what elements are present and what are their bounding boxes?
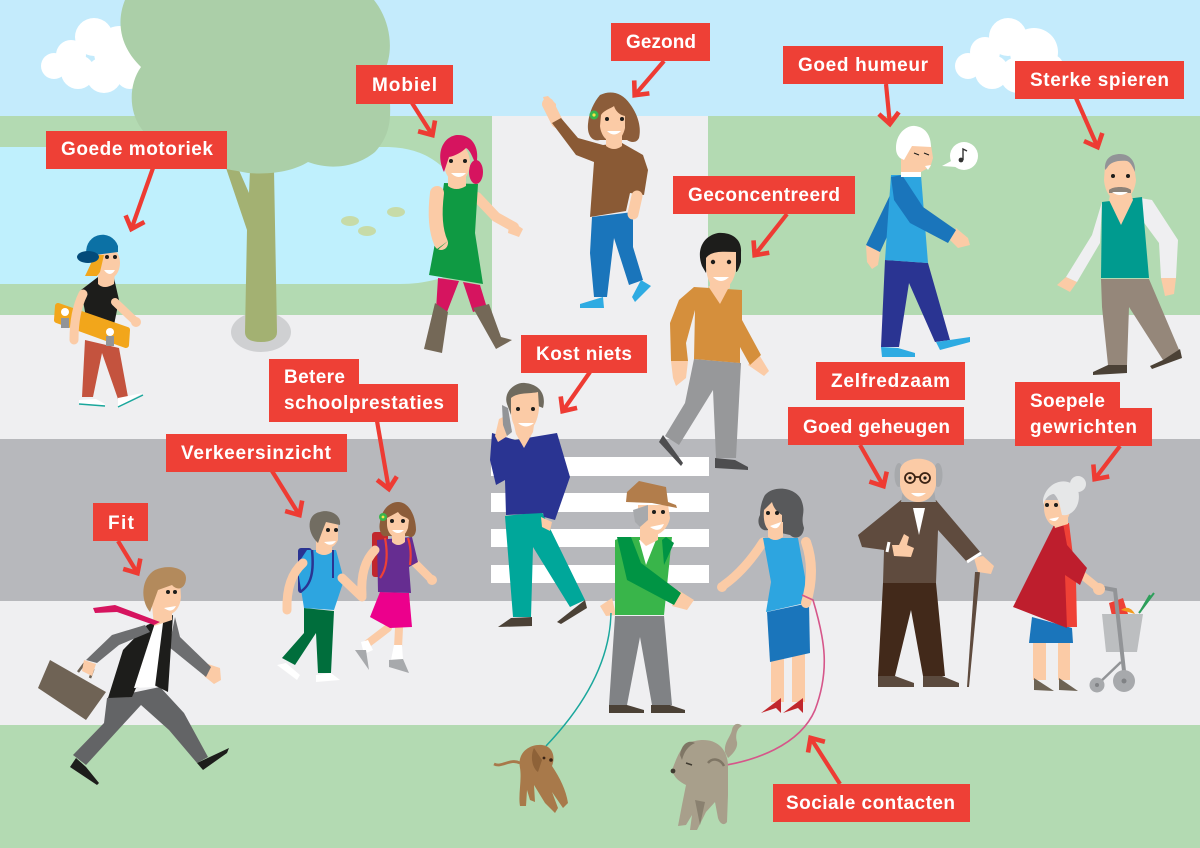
person: older man in teal vest xyxy=(1057,154,1182,375)
label: Fit: Fit xyxy=(108,513,135,534)
label: Betere schoolprestaties: Betere xyxy=(284,367,345,388)
person: waving woman in brown xyxy=(543,92,651,308)
label: Geconcentreerd xyxy=(673,176,855,256)
zebra crossing xyxy=(491,457,709,583)
label: Kost niets xyxy=(521,335,647,412)
label: Gezond: Gezond xyxy=(626,32,696,53)
dog: brown xyxy=(494,745,568,813)
label: Verkeersinzicht xyxy=(166,434,347,516)
person: singing man with white hair xyxy=(866,126,970,357)
leash: teal xyxy=(546,613,611,746)
label: Goed humeur: Goed humeur xyxy=(798,55,929,76)
person: woman in blue with dog leash xyxy=(717,489,811,713)
label: Goed geheugen: Goed geheugen xyxy=(803,417,950,438)
person: man with hat walking a dog xyxy=(600,481,694,713)
label: Mobiel xyxy=(356,65,453,136)
water lilies xyxy=(341,207,405,236)
label: Sociale contacten xyxy=(773,737,970,822)
person: older woman with shopping trolley xyxy=(1013,476,1154,692)
label: Verkeersinzicht: Verkeersinzicht xyxy=(181,443,332,464)
label: Goed humeur xyxy=(783,46,943,125)
label: Gezond xyxy=(611,23,710,96)
label: Soepele gewrichten xyxy=(1015,382,1152,480)
label: Kost niets: Kost niets xyxy=(536,344,632,365)
shopping trolley xyxy=(1090,588,1154,692)
label: Goede motoriek: Goede motoriek xyxy=(61,139,213,160)
person: boy with backpack xyxy=(277,511,362,682)
person: man in orange sweater xyxy=(659,233,769,470)
label: Sterke spieren: Sterke spieren xyxy=(1030,70,1169,91)
person: boy with skateboard xyxy=(57,235,143,407)
person: woman in green dress xyxy=(424,135,523,353)
label: Sterke spieren xyxy=(1015,61,1184,148)
icon: speech bubble with music note xyxy=(942,142,978,170)
person: girl with backpack xyxy=(355,502,437,673)
person: running businessman with briefcase xyxy=(38,567,229,785)
label: Goede motoriek xyxy=(46,131,227,230)
label: Zelfredzaam xyxy=(816,362,965,400)
person: man on the phone xyxy=(490,383,587,627)
cloud left xyxy=(41,18,146,93)
label: Betere schoolprestaties: schoolprestaties xyxy=(284,393,444,414)
label: Goed geheugen xyxy=(788,407,964,487)
cloud right xyxy=(955,18,1064,93)
label: Betere schoolprestaties xyxy=(269,359,458,490)
label: Geconcentreerd: Geconcentreerd xyxy=(688,185,840,206)
dog: grey xyxy=(671,724,742,830)
leash: pink xyxy=(713,595,824,767)
tree xyxy=(120,0,390,352)
label: Zelfredzaam: Zelfredzaam xyxy=(831,371,950,392)
label: Soepele gewrichten: gewrichten xyxy=(1030,417,1137,438)
label: Soepele gewrichten: Soepele xyxy=(1030,391,1105,412)
label: Mobiel: Mobiel xyxy=(372,75,437,96)
label: Sociale contacten: Sociale contacten xyxy=(786,793,955,814)
label: Fit xyxy=(93,503,148,574)
person: older man with glasses and cane xyxy=(858,459,994,687)
